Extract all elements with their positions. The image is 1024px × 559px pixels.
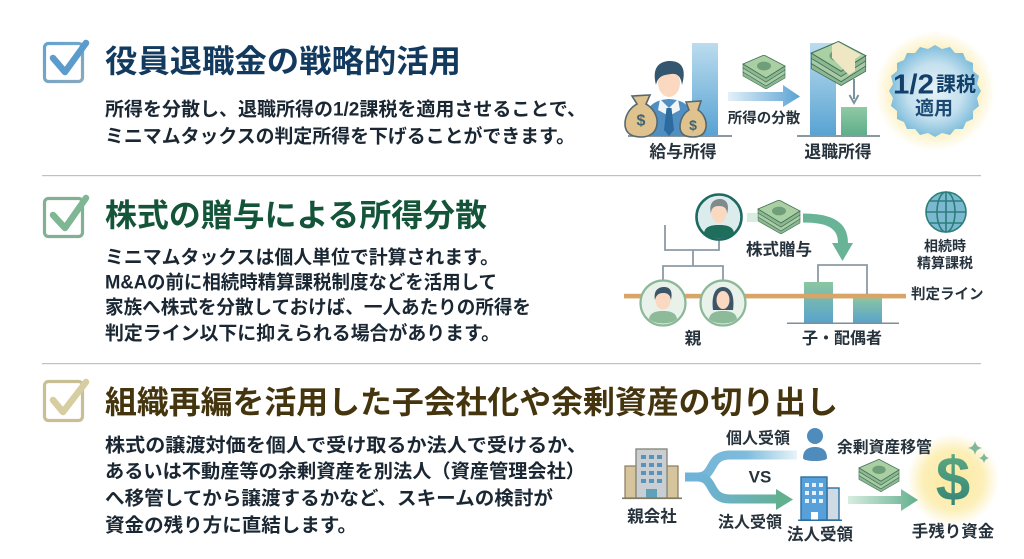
label: judgment line: 判定ライン	[911, 286, 984, 303]
icon: parent portrait male	[640, 280, 686, 326]
badge: half taxation applied: 適用	[915, 98, 953, 120]
text block: section 3: あるいは不動産等の余剰資産を別法人（資産管理会社）	[105, 460, 585, 482]
icon: parent company building	[622, 449, 682, 499]
label: settlement tax: 精算課税	[917, 255, 973, 271]
heading: section 2: 株式の贈与による所得分散	[105, 197, 487, 233]
badge: half taxation applied: 課税	[936, 73, 976, 96]
icon: person	[803, 428, 827, 461]
text block: section 2: 判定ライン以下に抑えられる場合があります。	[105, 322, 500, 344]
icon: green checkbox	[44, 198, 86, 236]
badge: half taxation applied	[875, 31, 995, 151]
bar: salary income	[692, 43, 718, 135]
heading: section 1: 役員退職金の戦略的活用	[105, 43, 461, 79]
bar: retirement income	[810, 43, 836, 135]
text block: section 3: へ移管してから譲渡するかなど、スキームの検討が	[105, 486, 553, 510]
icon: glowing dollar: $	[936, 446, 970, 514]
text block: section 2: ミニマムタックスは個人単位で計算されます。	[105, 246, 499, 268]
label: income distribution: 所得の分散	[728, 110, 801, 127]
icon: cash	[747, 200, 800, 234]
icon: globe	[926, 192, 966, 232]
icon: cash	[859, 459, 899, 492]
diagram: receiving options	[622, 428, 999, 544]
label: corporate receipt: 法人受領	[718, 512, 782, 532]
label: individual receipt: 個人受領	[726, 428, 790, 448]
arrow: split paths	[685, 455, 797, 510]
arrow: income shift	[728, 85, 800, 107]
text block: section 3: 資金の残り方に直結します。	[105, 514, 357, 536]
label: surplus asset transfer: 余剰資産移管	[837, 438, 932, 456]
arrow: to net funds	[848, 489, 918, 511]
text block: section 2: M&Aの前に相続時精算課税制度などを活用して	[105, 270, 497, 294]
icon: large cash bundle	[811, 41, 866, 86]
icon: glowing dollar	[907, 434, 999, 526]
panel: stock gifts	[44, 192, 984, 348]
label: salary income: 給与所得	[649, 142, 717, 162]
label: vs: VS	[749, 468, 771, 486]
icon: corporate building	[798, 477, 842, 521]
text block: section 1: 所得を分散し、退職所得の1/2課税を適用させることで、	[105, 98, 586, 120]
arrow: down	[850, 79, 858, 103]
label: parents: 親	[685, 329, 702, 348]
judgment line	[624, 294, 906, 298]
heading: section 3: 組織再編を活用した子会社化や余剰資産の切り出し	[105, 384, 838, 420]
diagram: family tree and gift	[624, 192, 984, 348]
panel: executive retirement pay	[44, 31, 995, 162]
chart: salary to retirement income shift	[625, 41, 880, 162]
icon: giver portrait	[696, 194, 742, 240]
bar: child	[804, 282, 833, 323]
text block: section 1	[105, 98, 586, 148]
label: stock gift: 株式贈与	[746, 239, 812, 259]
icon: businessman with money bags	[625, 61, 706, 137]
icon: businessman with money bags: $	[637, 112, 646, 130]
panel: reorganization	[44, 382, 999, 544]
badge: half taxation applied: 1/2	[893, 68, 934, 100]
text block: section 2	[105, 246, 531, 344]
arrow: gift to children	[803, 214, 853, 261]
label: corporate receipt under building: 法人受領	[787, 525, 854, 544]
icon: blue checkbox	[44, 43, 86, 82]
label: children and spouse: 子・配偶者	[802, 330, 882, 348]
icon: businessman with money bags: $	[689, 117, 697, 133]
label: settlement tax	[917, 238, 973, 271]
icon: tan checkbox	[44, 382, 86, 420]
label: net funds: 手残り資金	[912, 521, 995, 541]
icon: parent portrait female	[700, 280, 746, 326]
text block: section 2: 家族へ株式を分散しておけば、一人あたりの所得を	[105, 296, 531, 318]
label: parent company: 親会社	[627, 507, 677, 526]
text block: section 3	[105, 434, 587, 536]
label: settlement tax: 相続時	[924, 238, 966, 254]
text block: section 1: ミニマムタックスの判定所得を下げることができます。	[105, 124, 575, 148]
label: retirement income: 退職所得	[804, 142, 872, 162]
bar: taxable half	[841, 107, 867, 135]
bar: spouse	[853, 297, 882, 323]
icon: cash	[743, 55, 785, 89]
text block: section 3: 株式の譲渡対価を個人で受け取るか法人で受けるか、	[105, 434, 587, 456]
